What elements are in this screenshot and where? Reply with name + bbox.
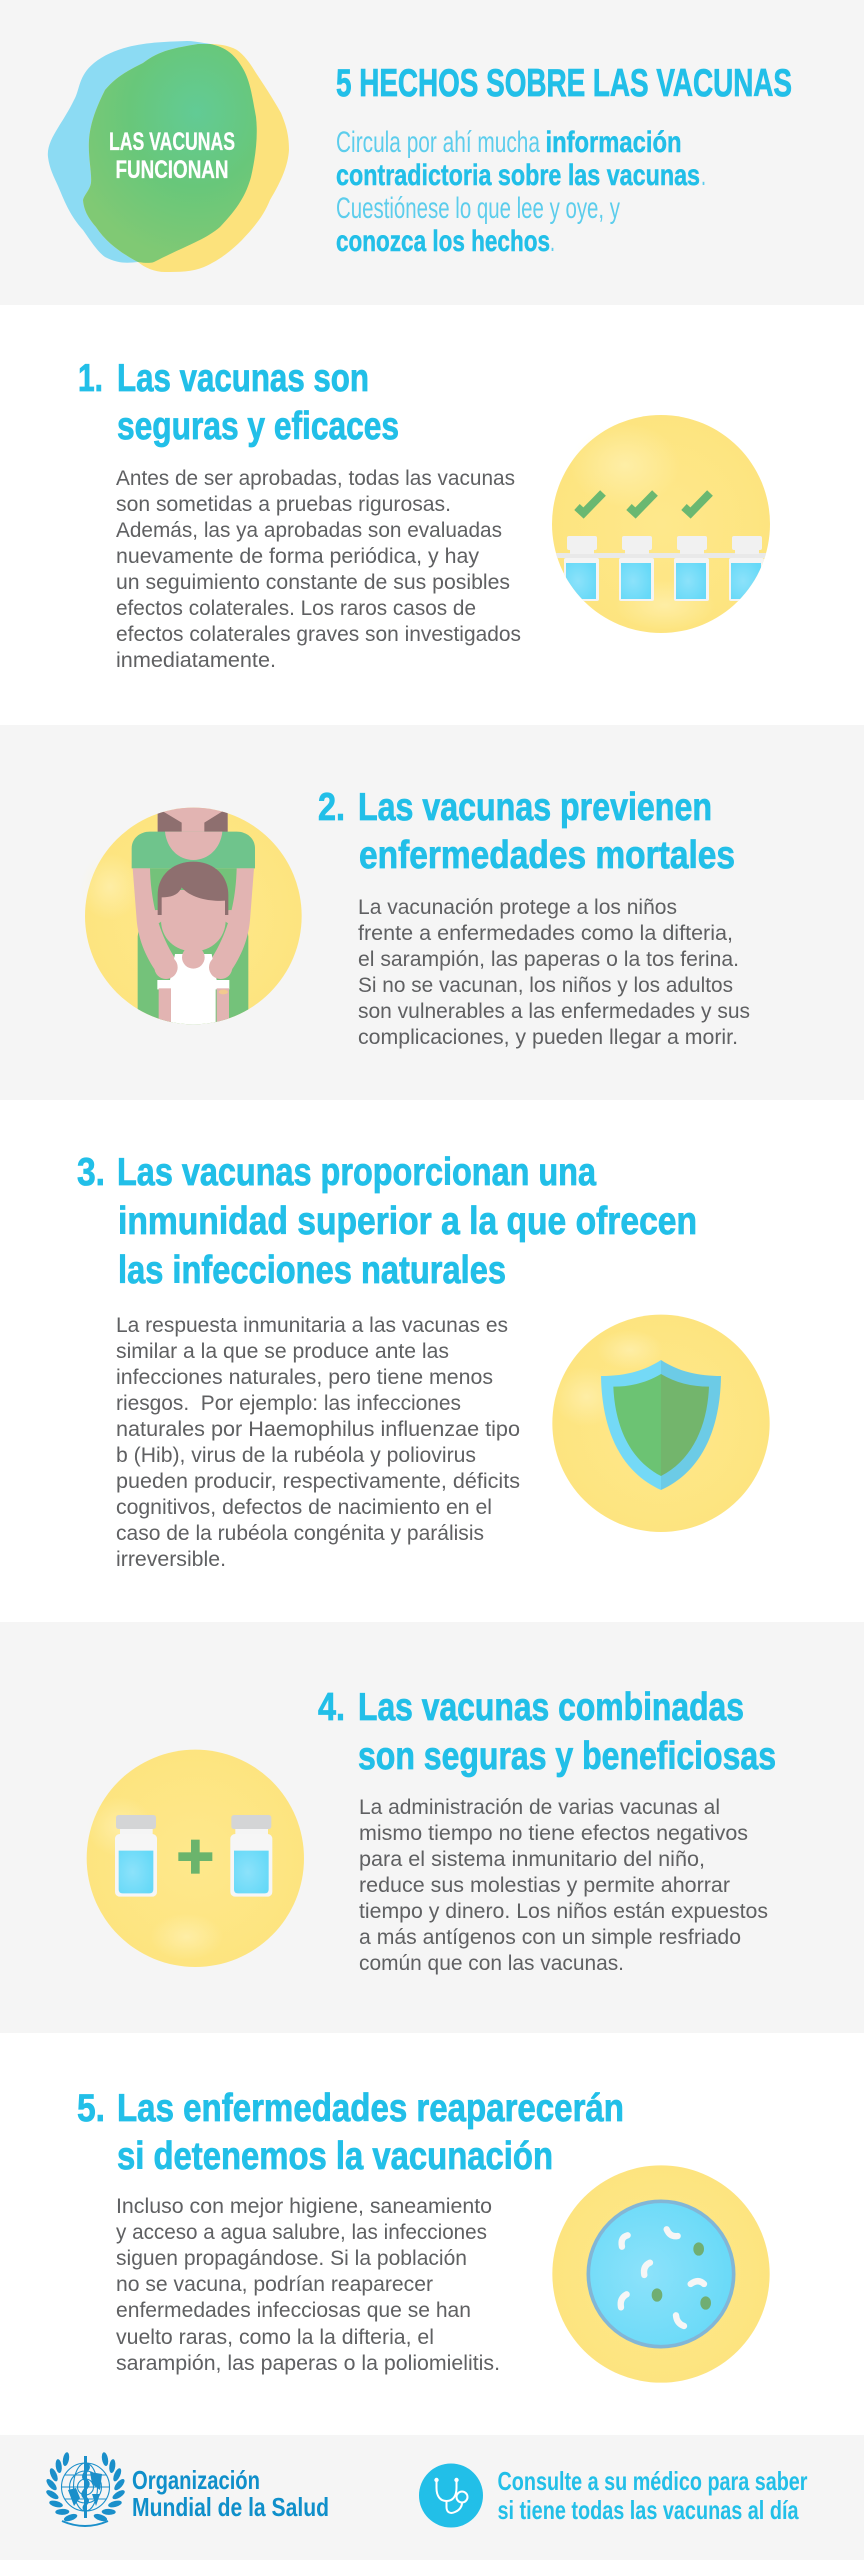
heading: fact 4: Las vacunas combinadas [358,1686,744,1729]
body text: fact 5: no se vacuna, podrían reaparecer [116,2273,433,2296]
panel: footer [0,2435,864,2560]
heading: fact 2 [318,786,735,877]
heading: fact 3: Las vacunas proporcionan una [117,1151,596,1194]
organization name: Mundial de la Salud [132,2492,329,2522]
heading: fact 5 [77,2087,624,2178]
body text: fact 4: común que con las vacunas. [359,1952,624,1975]
body text: fact 2: Si no se vacunan, los niños y los adultos [358,974,733,997]
body text: fact 3: similar a la que se produce ante las [116,1340,449,1363]
icon: two vials with plus [87,1750,304,1967]
body text: fact 1: efectos colaterales. Los raros casos de [116,597,476,620]
icon: stethoscope [419,2464,483,2528]
logo: WHO emblem [45,2452,126,2526]
body text: fact 5: y acceso a agua salubre, las infecciones [116,2221,487,2244]
body text: fact 3: irreversible. [116,1548,226,1571]
body text: fact 3 [116,1314,520,1571]
call to action [498,2466,808,2525]
heading: fact 1 [78,357,399,448]
body text: fact 1: Además, las ya aprobadas son evaluadas [116,519,502,542]
panel: header [0,0,864,305]
heading: fact 5: Las enfermedades reaparecerán [117,2087,624,2130]
panel: fact 5 [0,2033,864,2435]
watercolor badge: las vacunas funcionan: FUNCIONAN [116,156,228,184]
icon: petri dish [552,2165,770,2383]
organization name: Organización [132,2465,260,2495]
intro text: . [701,159,706,192]
watercolor badge: las vacunas funcionan: LAS VACUNAS [109,128,235,156]
body text: fact 5: sarampión, las paperas o la poliomielitis. [116,2352,500,2375]
panel: fact 1 [80,364,770,667]
body text: fact 2: frente a enfermedades como la difteria, [358,922,733,945]
body text: fact 3: cognitivos, defectos de nacimiento en el [116,1496,492,1519]
heading: fact 1: Las vacunas son [117,357,369,400]
heading: fact 2: enfermedades mortales [359,834,735,877]
body text: fact 4: La administración de varias vacunas al [359,1796,720,1819]
icon: adult holding child [80,803,302,1030]
intro text [336,126,706,258]
body text: fact 2: complicaciones, y pueden llegar a morir. [358,1026,738,1049]
body text: fact 1: efectos colaterales graves son investigados [116,623,521,646]
heading: fact 3: las infecciones naturales [118,1249,506,1292]
heading: fact 2: Las vacunas previenen [358,786,712,829]
body text: fact 4: reduce sus molestias y permite ahorrar [359,1874,730,1897]
body text: fact 3: naturales por Haemophilus influenzae tipo [116,1418,520,1441]
body text: fact 4: para el sistema inmunitario del niño, [359,1848,705,1871]
body text: fact 3: La respuesta inmunitaria a las vacunas es [116,1314,508,1337]
body text: fact 5 [116,2195,500,2375]
body text: fact 3: infecciones naturales, pero tiene menos [116,1366,493,1389]
heading: fact 3: inmunidad superior a la que ofrecen [118,1200,697,1243]
panel: fact 3 [0,1100,864,1622]
body text: fact 2: son vulnerables a las enfermedades y sus [358,1000,750,1023]
intro text: Circula por ahí mucha [336,126,540,159]
body text: fact 2 [358,896,750,1049]
organization name [132,2465,329,2522]
heading: fact 1: seguras y eficaces [117,405,399,448]
body text: fact 1 [116,467,521,672]
intro text: . [550,225,555,258]
heading: fact 1: 1. [78,357,103,400]
heading: fact 5: 5. [77,2087,105,2130]
heading: fact 5: si detenemos la vacunación [117,2135,553,2178]
body text: fact 3: caso de la rubéola congénita y parálisis [116,1522,484,1545]
body text: fact 2: La vacunación protege a los niños [358,896,677,919]
heading: fact 2: 2. [318,786,345,829]
body text: fact 4: a más antígenos con un simple resfriado [359,1926,741,1949]
body text: fact 3: b (Hib), virus de la rubéola y poliovirus [116,1444,476,1467]
body text: fact 2: el sarampión, las paperas o la tos ferina. [358,948,739,971]
body text: fact 3: riesgos. Por ejemplo: las infecciones [116,1392,461,1415]
icon: shield [552,1315,770,1532]
body text: fact 5: Incluso con mejor higiene, saneamiento [116,2195,492,2218]
heading: fact 3: 3. [77,1151,105,1194]
body text: fact 3: pueden producir, respectivamente, déficits [116,1470,520,1493]
body text: fact 5: siguen propagándose. Si la población [116,2247,467,2270]
body text: fact 4: mismo tiempo no tiene efectos negativos [359,1822,748,1845]
heading: fact 3 [77,1151,697,1292]
panel: fact 4 [0,1622,864,2033]
body text: fact 1: nuevamente de forma periódica, y hay [116,545,479,568]
body text: fact 4: tiempo y dinero. Los niños están expuestos [359,1900,768,1923]
watercolor badge: las vacunas funcionan [48,41,289,272]
panel: fact 2 [0,725,864,1100]
heading: fact 4: son seguras y beneficiosas [358,1735,776,1778]
intro text: información [546,126,682,159]
body text: fact 1: un seguimiento constante de sus posibles [116,571,510,594]
body text: fact 5: vuelto raras, como la la difteria, el [116,2326,434,2349]
heading: fact 4 [318,1686,776,1778]
body text: fact 1: inmediatamente. [116,649,276,672]
heading: fact 4: 4. [318,1686,345,1729]
intro text: contradictoria sobre las vacunas [336,159,700,192]
body text: fact 4 [359,1796,768,1975]
icon: vials with check marks [552,415,770,633]
body text: fact 1: Antes de ser aprobadas, todas las vacunas [116,467,515,490]
body text: fact 1: son sometidas a pruebas rigurosas. [116,493,451,516]
intro text: conozca los hechos [336,225,550,258]
body text: fact 5: enfermedades infecciosas que se han [116,2299,471,2322]
intro text: Cuestiónese lo que lee y oye, y [336,192,620,225]
